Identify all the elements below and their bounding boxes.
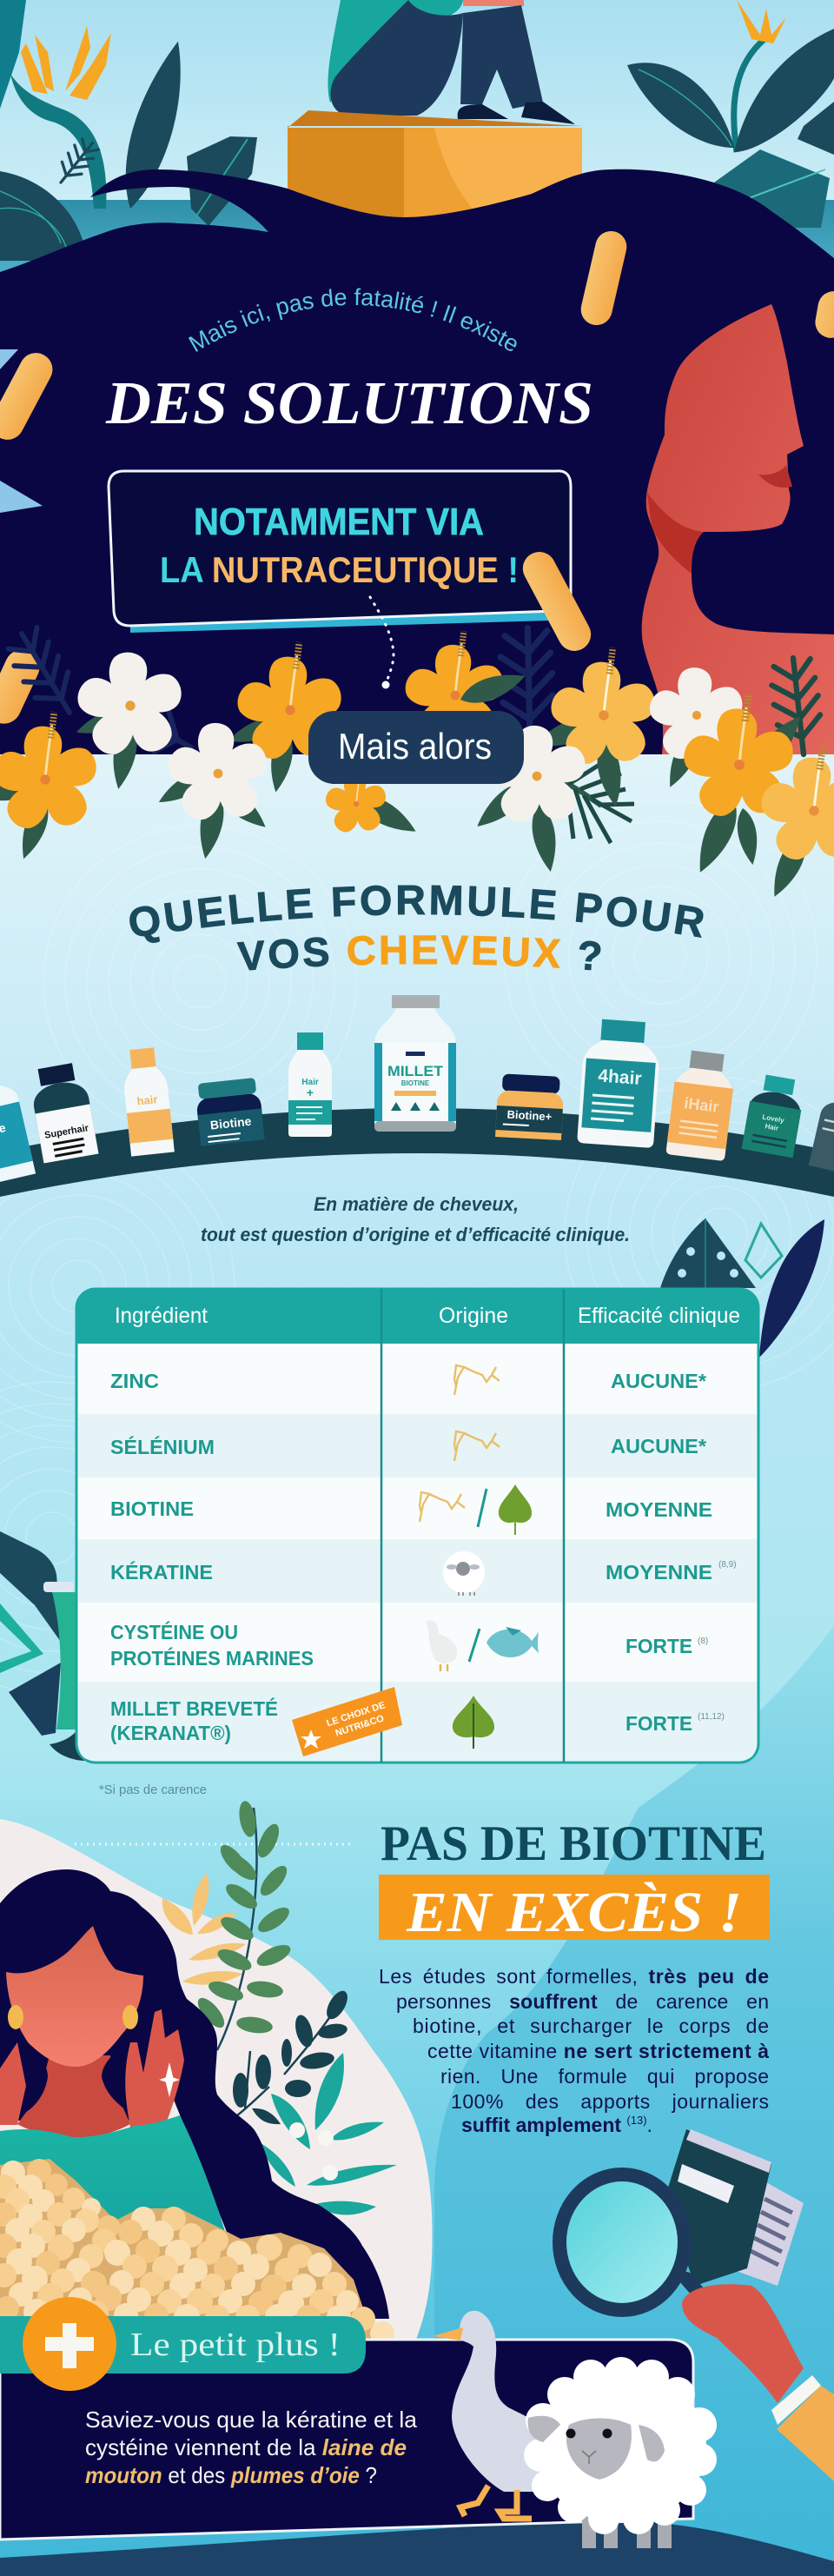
body paragraph: . (647, 2114, 652, 2136)
mais alors pill (308, 711, 524, 784)
dotted connector (370, 597, 394, 688)
bottle: ihair (665, 1049, 738, 1161)
bottle: left edge (0, 1079, 36, 1187)
references: (8) (698, 1637, 708, 1646)
floor (0, 2520, 834, 2576)
efficacy ratings: MOYENNE (606, 1498, 712, 1521)
efficacy ratings: AUCUNE* (611, 1370, 706, 1392)
bottle: lovely hair (740, 1072, 806, 1163)
plants left (0, 26, 257, 261)
seated person on box (328, 0, 575, 124)
orange box (288, 110, 582, 223)
bottle: 4hair (577, 1018, 662, 1148)
body paragraph: cette vitamine ne sert strictement à (427, 2040, 769, 2062)
paper stack (729, 2181, 804, 2286)
handle (686, 2279, 738, 2338)
bottle: superhair (28, 1061, 99, 1164)
hair glints (0, 349, 43, 513)
big hair shape (0, 169, 834, 754)
body paragraph: personnes souffrent de carence en (396, 1990, 769, 2013)
bottle: hair (120, 1046, 175, 1157)
card text: mouton et des plumes d’oie ? (85, 2462, 377, 2488)
suit sleeve (777, 2386, 834, 2481)
plant: green branch (194, 1800, 294, 2050)
ingredient names: BIOTINE (110, 1497, 194, 1520)
bottle: lovely hair: Lovely (762, 1113, 785, 1125)
capsules (0, 228, 834, 729)
plants right (627, 0, 834, 228)
bottle: biotine plus jar: Biotine+ (506, 1108, 553, 1123)
bottle: biotine jar (195, 1078, 265, 1146)
panel: hero scene (0, 0, 834, 897)
heading: pas de biotine: PAS DE BIOTINE (381, 1816, 766, 1871)
dotted guide (75, 1842, 351, 1846)
ingredient names: KÉRATINE (110, 1560, 213, 1583)
icon: synthetic molecule zinc (454, 1365, 500, 1395)
flowing hair (0, 1869, 389, 2319)
plant: white buds (289, 2122, 338, 2181)
hand (682, 2284, 804, 2403)
bottle: right edge (809, 1098, 834, 1178)
badge: le choix de nutri&co (292, 1687, 402, 1756)
capsule over box (517, 546, 597, 657)
panel: biotine section (0, 1800, 834, 2576)
ingredient names: MILLET BREVETÉ (110, 1696, 278, 1720)
icon: sheep keratin (443, 1551, 485, 1596)
bottle: millet featured: BIOTINE (401, 1079, 430, 1087)
banner: en excès: EN EXCÈS ! (406, 1881, 742, 1944)
efficacy ratings: AUCUNE* (611, 1435, 706, 1457)
background ring texture (0, 800, 834, 1695)
body paragraph: 100% des apports journaliers (451, 2090, 769, 2113)
plus circle (23, 2297, 116, 2391)
table header: Ingrédient (115, 1304, 208, 1328)
icon: molecule or leaf biotine (420, 1484, 532, 1535)
hands (0, 2009, 184, 2128)
magnifier with book and hand (559, 2129, 834, 2481)
callout box: nutraceutique: LA NUTRACEUTIQUE ! (160, 549, 519, 590)
references: (8,9) (718, 1560, 737, 1570)
heading: des solutions: DES SOLUTIONS (105, 370, 593, 437)
darker background shape (434, 1625, 834, 2576)
body paragraph: rien. Une formule qui propose (440, 2065, 769, 2088)
alternating row bands (78, 1414, 757, 1761)
goose (433, 2311, 543, 2519)
earrings (8, 2005, 138, 2029)
card text (85, 2407, 418, 2488)
panel: formula section (0, 885, 834, 1761)
plant: dark branch (233, 1988, 352, 2124)
intro sentence: En matière de cheveux, (314, 1193, 519, 1215)
callout box: nutraceutique (109, 471, 571, 633)
efficacy ratings (606, 1370, 712, 1735)
plant: orange leaves (162, 1873, 246, 1985)
bottle: hair plus: Hair (301, 1078, 319, 1087)
icon: synthetic molecule selenium (454, 1431, 500, 1461)
dark card (0, 2340, 693, 2539)
book (665, 2129, 771, 2286)
mais alors pill: Mais alors (338, 726, 492, 767)
pill (0, 2316, 366, 2374)
body paragraph: biotine, et surcharger le corps de (413, 2015, 769, 2037)
tropical fronds (0, 612, 834, 843)
table header (76, 1289, 758, 1344)
intro sentence (201, 1193, 630, 1245)
bottle: millet featured (374, 995, 456, 1132)
bottle: biotine plus jar (495, 1073, 565, 1140)
pill text: Le petit plus ! (130, 2327, 341, 2363)
icon: goose or fish (426, 1620, 539, 1671)
flower garland (0, 631, 834, 901)
cuff (771, 2375, 821, 2425)
card text: Saviez-vous que la kératine et la (85, 2407, 418, 2433)
body paragraph: suffit amplement (461, 2114, 621, 2136)
table header: Efficacité clinique (578, 1304, 740, 1328)
ingredient names: PROTÉINES MARINES (110, 1646, 314, 1670)
lips (758, 465, 792, 488)
sky and sea backdrop (0, 0, 834, 295)
table body (76, 1289, 758, 1763)
body paragraph: (13) (626, 2114, 647, 2127)
woman silhouette profile (642, 304, 834, 754)
curved intro line: Mais ici, pas de fatalité ! Il existe (188, 289, 517, 352)
neck (17, 2055, 130, 2137)
callout box: nutraceutique: NOTAMMENT VIA (194, 501, 484, 543)
bottle: 4hair: 4hair (598, 1066, 642, 1089)
bottle: hair: hair (136, 1092, 158, 1108)
efficacy ratings: MOYENNE (606, 1561, 712, 1583)
decorative leaves beside table (660, 1218, 824, 1358)
body paragraph: Les études sont formelles, très peu de (379, 1965, 769, 1988)
intro sentence: tout est question d’origine et d’efficacité clinique. (201, 1224, 630, 1245)
bottle: biotine jar: Biotine (209, 1114, 252, 1132)
title line two: VOS CHEVEUX ? (236, 935, 601, 970)
table header: Origine (439, 1304, 508, 1328)
references (698, 1560, 737, 1722)
plant: teal leaves (261, 2053, 397, 2215)
ingredient names: ZINC (110, 1370, 159, 1392)
title line one: QUELLE FORMULE POUR (129, 885, 704, 943)
test tube and left leaves (0, 1531, 84, 1761)
woman with millet (0, 1869, 394, 2347)
hair locks over neck (16, 2043, 130, 2114)
bottle: lovely hair: Hair (764, 1122, 779, 1132)
cream blob (0, 1819, 433, 2364)
lens (559, 2174, 685, 2310)
efficacy ratings: FORTE (626, 1635, 692, 1657)
column rules (381, 1289, 564, 1763)
bottle: superhair: Superhair (43, 1123, 90, 1141)
body paragraph (379, 1965, 769, 2136)
bottle: millet featured: MILLET (387, 1063, 444, 1079)
sheep (524, 2357, 717, 2548)
bottle: ihair: iHair (683, 1094, 720, 1116)
ingredient names: (KERANAT®) (110, 1722, 231, 1744)
teal top (0, 2115, 252, 2320)
bottle: hair plus (288, 1032, 332, 1137)
ingredient names: SÉLÉNIUM (110, 1435, 215, 1458)
face (6, 1926, 143, 2067)
icon: large leaf (453, 1696, 494, 1749)
efficacy ratings: FORTE (626, 1712, 692, 1735)
footnote: *Si pas de carence (99, 1783, 207, 1797)
table: ingredient comparison (76, 1289, 758, 1763)
curved shelf (0, 1108, 834, 1197)
sparkle (159, 2062, 180, 2097)
ingredient names: CYSTÉINE OU (110, 1620, 238, 1643)
millet pile (0, 2159, 394, 2347)
panel: le petit plus (0, 2297, 693, 2539)
badge: le choix de nutri&co: LE CHOIX DE (325, 1700, 387, 1729)
card text: cystéine viennent de la laine de (85, 2434, 407, 2460)
ingredient names (110, 1370, 314, 1744)
badge: le choix de nutri&co: NUTRI&CO (334, 1713, 386, 1739)
references: (11,12) (698, 1712, 725, 1722)
bottle: hair plus: + (307, 1086, 314, 1099)
